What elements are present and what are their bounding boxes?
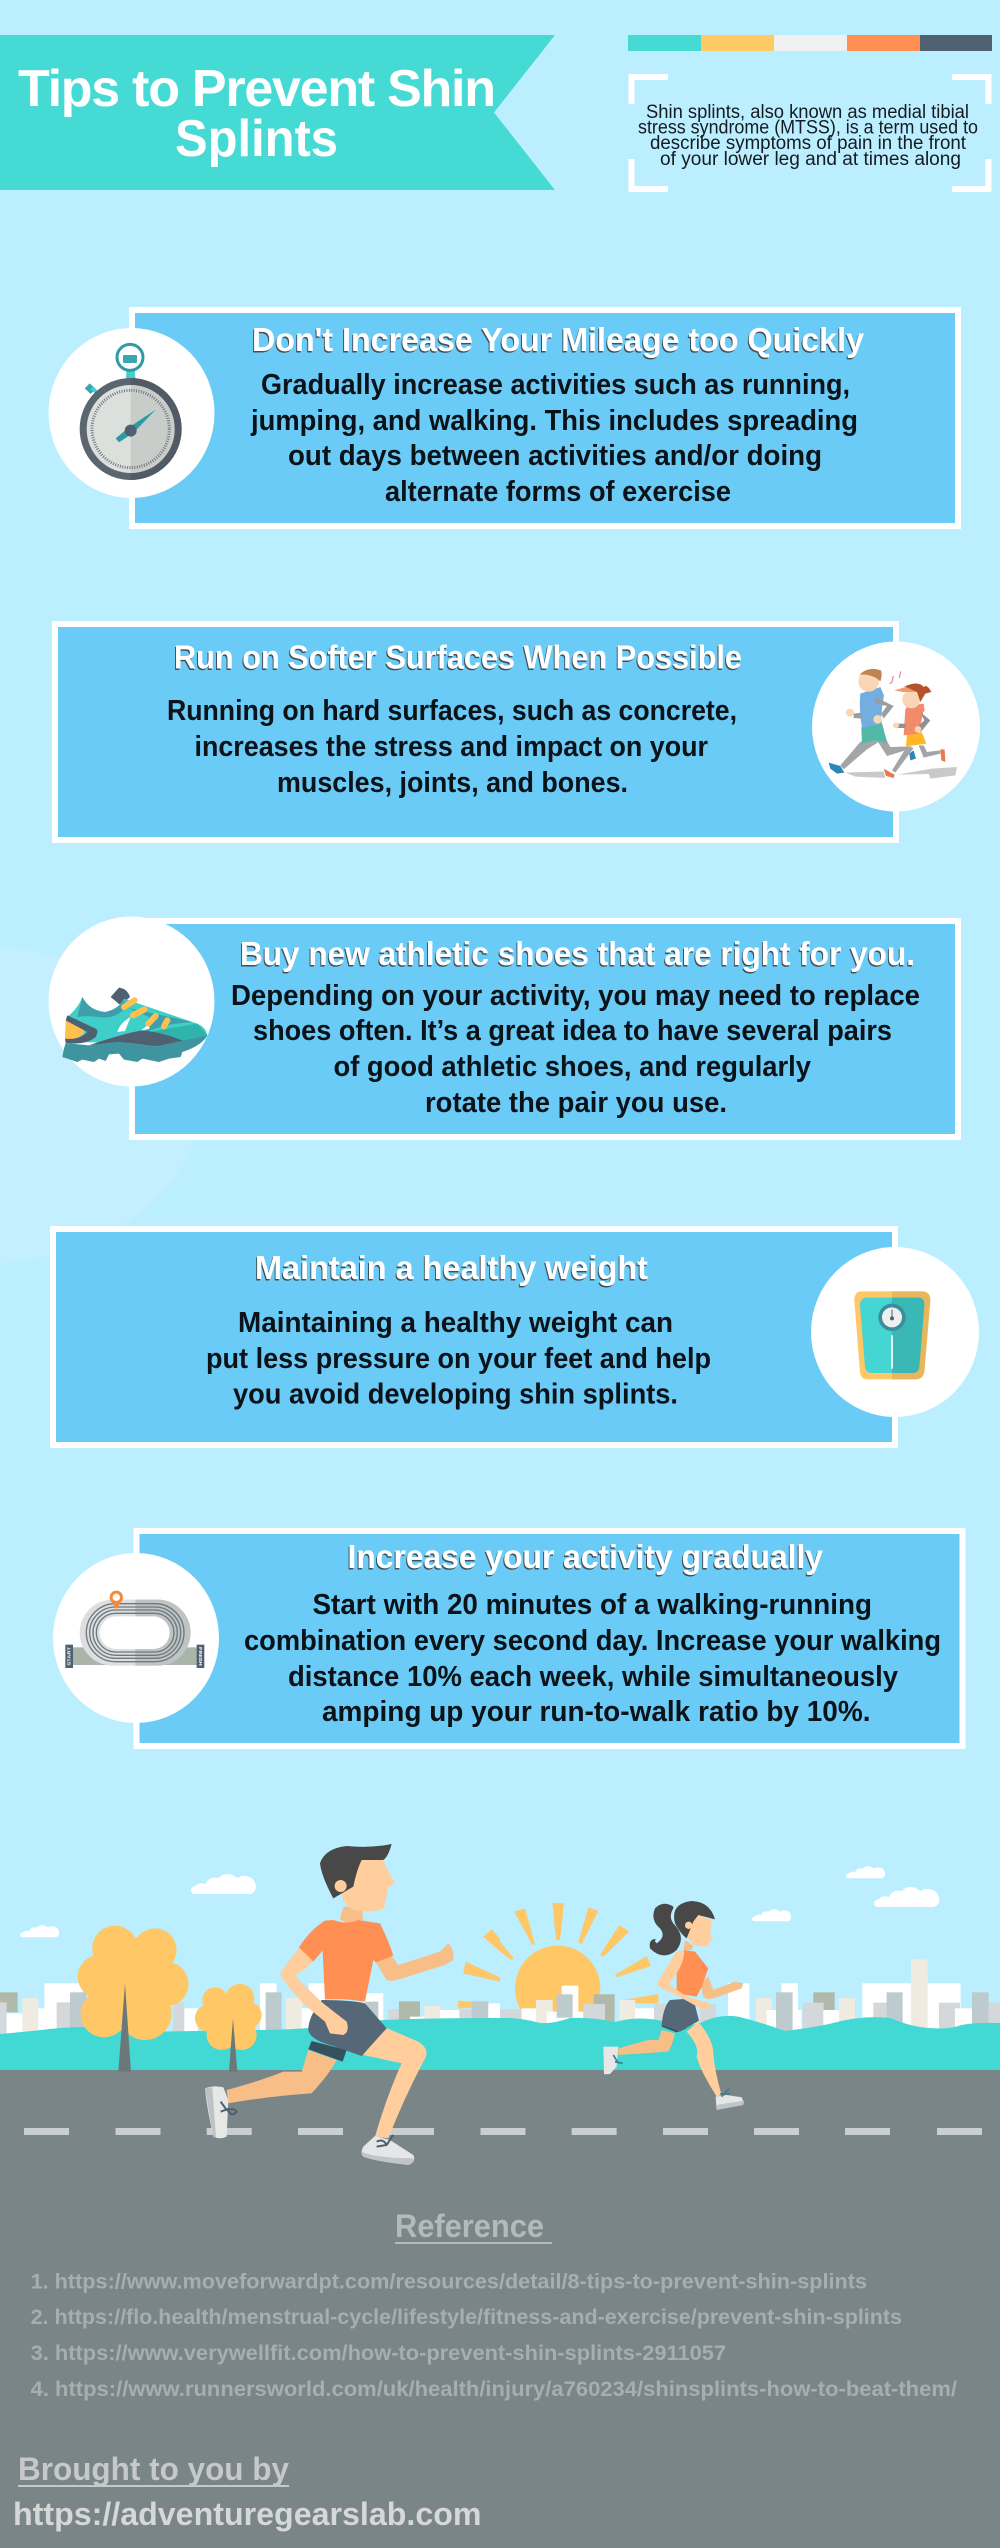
icon: two runners bbox=[812, 642, 980, 812]
text: tip 2 body: Running on hard surfaces, such as concrete, bbox=[167, 695, 737, 727]
text: tip 1 body bbox=[250, 369, 858, 508]
panel: tip 1 mileage bbox=[48, 310, 958, 526]
text: tip 5 body: distance 10% each week, while simultaneously bbox=[288, 1661, 898, 1693]
text: tip 3 body: rotate the pair you use. bbox=[425, 1087, 727, 1119]
text: tip 5 body: combination every second day. Increase your walking bbox=[244, 1625, 941, 1657]
text: tip 4 body: put less pressure on your feet and help bbox=[206, 1343, 711, 1375]
intro text with corner brackets bbox=[632, 77, 988, 189]
colour strip bbox=[628, 35, 992, 51]
text: tip 3 body bbox=[231, 980, 920, 1119]
illustration: running scene bbox=[0, 1844, 1000, 2548]
reference list: 2. https://flo.health/menstrual-cycle/lifestyle/fitness-and-exercise/prevent-shin-splints bbox=[31, 2306, 902, 2329]
heading: tip 2: Run on Softer Surfaces When Possible bbox=[174, 639, 742, 676]
hills bbox=[0, 2016, 1000, 2070]
intro text with corner brackets: describe symptoms of pain in the front bbox=[650, 133, 967, 154]
road centre dashes bbox=[24, 2128, 982, 2135]
title banner bbox=[0, 35, 555, 190]
text: tip 5 body: amping up your run-to-walk ratio by 10%. bbox=[322, 1696, 870, 1728]
heading: tip 1: Don't Increase Your Mileage too Quickly bbox=[252, 321, 865, 358]
footer credit: Brought to you by bbox=[18, 2451, 289, 2487]
skyline bbox=[0, 1983, 500, 2037]
icon: running track: FINISH bbox=[198, 1647, 203, 1666]
panel: tip 4 healthy weight bbox=[53, 1229, 979, 1445]
text: tip 4 body bbox=[206, 1307, 711, 1410]
icon: running track bbox=[53, 1553, 219, 1723]
title banner: Splints bbox=[175, 110, 338, 168]
text: tip 2 body bbox=[167, 695, 737, 799]
text: tip 1 body: Gradually increase activities such as running, bbox=[261, 369, 850, 401]
intro text with corner brackets: Shin splints, also known as medial tibial bbox=[646, 102, 969, 123]
text: tip 1 body: alternate forms of exercise bbox=[385, 476, 731, 508]
sun and rays bbox=[458, 1903, 658, 2031]
reference list: 3. https://www.verywellfit.com/how-to-prevent-shin-splints-2911057 bbox=[31, 2342, 726, 2365]
heading: tip 3: Buy new athletic shoes that are right for you. bbox=[240, 935, 915, 972]
text: tip 4 body: you avoid developing shin splints. bbox=[233, 1378, 678, 1410]
text: tip 3 body: Depending on your activity, you may need to replace bbox=[231, 980, 920, 1012]
icon: weighing scale bbox=[811, 1247, 979, 1417]
intro text with corner brackets: stress syndrome (MTSS), is a term used to bbox=[638, 118, 978, 138]
reference list: 4. https://www.runnersworld.com/uk/health/injury/a760234/shinsplints-how-to-beat-them/ bbox=[31, 2378, 957, 2401]
heading: tip 4: Maintain a healthy weight bbox=[255, 1249, 648, 1286]
text: tip 4 body: Maintaining a healthy weight can bbox=[238, 1307, 673, 1339]
intro text with corner brackets: of your lower leg and at times along bbox=[660, 149, 961, 170]
reference list bbox=[31, 2271, 957, 2401]
text: tip 5 body: Start with 20 minutes of a walking-running bbox=[312, 1589, 872, 1621]
icon: running shoe bbox=[48, 916, 214, 1086]
title banner: Tips to Prevent Shin bbox=[18, 60, 496, 118]
text: tip 3 body: of good athletic shoes, and regularly bbox=[334, 1051, 811, 1083]
panel: tip 5 increase activity bbox=[53, 1531, 962, 1746]
clouds bbox=[20, 1866, 939, 1937]
text: tip 2 body: increases the stress and impact on your bbox=[194, 731, 708, 763]
figure: male runner bbox=[205, 1844, 454, 2165]
text: tip 5 body bbox=[244, 1589, 941, 1728]
footer credit: https://adventuregearslab.com bbox=[13, 2496, 482, 2532]
panel: tip 3 athletic shoes bbox=[48, 916, 958, 1137]
text: tip 2 body: muscles, joints, and bones. bbox=[277, 767, 628, 799]
icon: stopwatch bbox=[48, 328, 214, 498]
icon: running track: START bbox=[67, 1647, 72, 1666]
panel: tip 2 softer surfaces bbox=[55, 624, 980, 840]
road bbox=[0, 2070, 1000, 2548]
heading: tip 5: Increase your activity gradually bbox=[348, 1538, 824, 1575]
text: tip 1 body: jumping, and walking. This includes spreading bbox=[250, 405, 858, 437]
figure: female runner bbox=[603, 1901, 744, 2110]
text: tip 1 body: out days between activities and/or doing bbox=[288, 440, 822, 472]
references bbox=[31, 2208, 957, 2401]
trees bbox=[78, 1926, 262, 2072]
reference list: 1. https://www.moveforwardpt.com/resources/detail/8-tips-to-prevent-shin-splints bbox=[31, 2271, 867, 2294]
heading: reference: Reference bbox=[395, 2208, 544, 2244]
text: tip 3 body: shoes often. It’s a great idea to have several pairs bbox=[253, 1015, 892, 1047]
footer credit bbox=[13, 2451, 482, 2532]
